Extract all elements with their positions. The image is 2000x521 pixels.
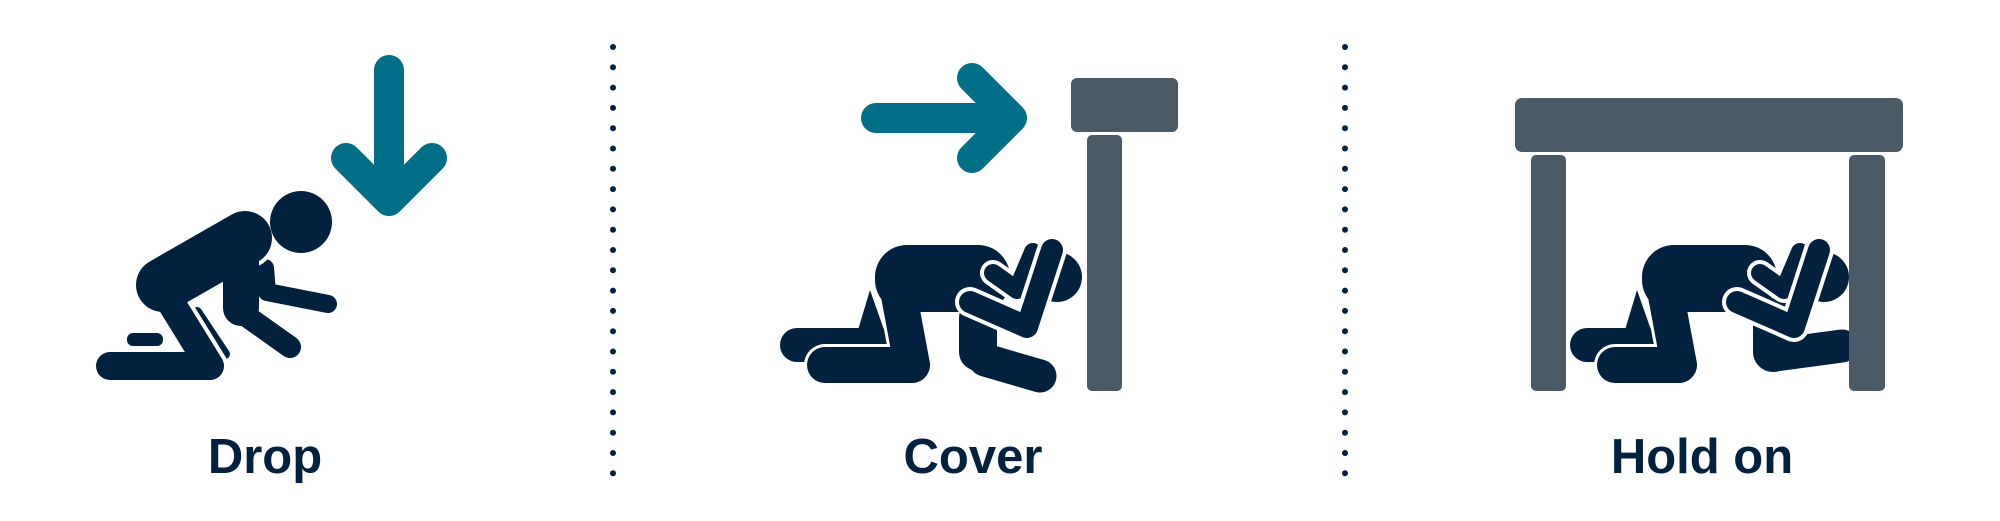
label: Drop: Drop	[208, 430, 322, 484]
icon: right arrow	[876, 78, 1012, 158]
icon: table	[1515, 98, 1903, 391]
panel: cover	[797, 78, 1178, 484]
divider dots 2	[1342, 44, 1348, 476]
icon: holding person	[1587, 245, 1849, 365]
icon: down arrow	[346, 70, 432, 201]
label: Cover: Cover	[904, 430, 1042, 484]
icon: table side	[1071, 78, 1178, 391]
panel: hold on	[1515, 98, 1903, 484]
divider dots 1	[610, 44, 616, 476]
panel: drop	[110, 70, 432, 484]
icon: covering person	[797, 245, 1082, 376]
icon: dropping person	[110, 191, 332, 366]
label: Hold on: Hold on	[1611, 430, 1793, 484]
